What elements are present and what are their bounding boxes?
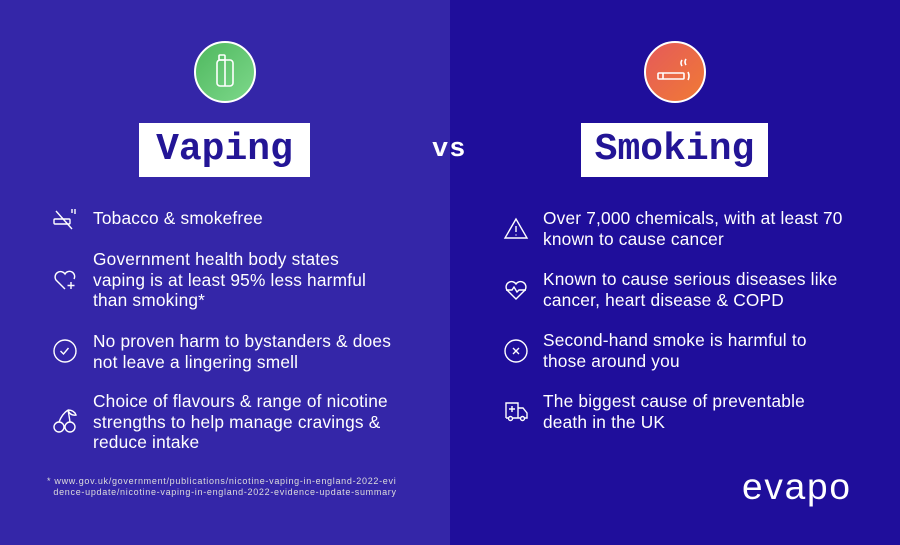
- text: government: than smoking*: [93, 290, 205, 310]
- heading: Smoking: Smoking: [595, 128, 754, 171]
- heading: Smoking: [581, 123, 768, 177]
- text: biggest cause: death in the UK: [543, 412, 665, 432]
- footnote: [47, 476, 397, 497]
- text: bystanders: not leave a lingering smell: [93, 352, 298, 372]
- heading: Vaping: Vaping: [156, 128, 293, 171]
- heading: vs: vs: [432, 135, 466, 165]
- text: diseases: Known to cause serious diseases like: [543, 269, 837, 289]
- text: second-hand: those around you: [543, 350, 680, 370]
- text: second-hand: [543, 330, 807, 370]
- text: chemicals: [543, 208, 843, 248]
- text: chemicals: known to cause cancer: [543, 228, 724, 248]
- icon: cherries: [53, 409, 77, 433]
- text: bystanders: No proven harm to bystanders & does: [93, 331, 391, 351]
- text: biggest cause: [543, 391, 805, 432]
- icon: cigarette: [644, 41, 706, 103]
- icon: x circle: [504, 339, 528, 363]
- heading: Vaping: [139, 123, 310, 177]
- text: government: vaping is at least 95% less harmful: [93, 270, 366, 290]
- icon: warning: [504, 218, 528, 239]
- icon: no smoking: [53, 209, 76, 230]
- footnote: * www.gov.uk/government/publications/nicotine-vaping-in-england-2022-evi: [47, 476, 396, 486]
- text: tobacco: Tobacco & smokefree: [93, 208, 263, 228]
- text: diseases: [543, 269, 837, 310]
- text: government: Government health body states: [93, 249, 339, 269]
- list: vaping points: [47, 208, 397, 497]
- text: biggest cause: The biggest cause of preventable: [543, 391, 805, 411]
- list: smoking points: [504, 208, 843, 432]
- icon: vape device: [194, 41, 256, 103]
- text: government: [93, 249, 366, 310]
- panel: vaping: [0, 0, 450, 545]
- text: flavours: Choice of flavours & range of nicotine: [93, 391, 388, 411]
- text: diseases: cancer, heart disease & COPD: [543, 290, 784, 310]
- text: second-hand: Second-hand smoke is harmful to: [543, 330, 807, 350]
- panel: smoking: [450, 0, 900, 545]
- text: flavours: strengths to help manage cravings &: [93, 412, 380, 432]
- icon: ambulance: [505, 402, 528, 422]
- text: bystanders: [93, 331, 391, 372]
- footnote: dence-update/nicotine-vaping-in-england-2022-evidence-update-summary: [53, 487, 397, 497]
- text: flavours: reduce intake: [93, 432, 199, 452]
- text: flavours: [93, 391, 388, 452]
- icon: heart plus: [54, 270, 76, 290]
- logo: evapo: evapo: [742, 466, 852, 507]
- text: chemicals: Over 7,000 chemicals, with at least 70: [543, 208, 843, 228]
- icon: heartbeat: [505, 280, 527, 300]
- icon: check circle: [53, 339, 77, 363]
